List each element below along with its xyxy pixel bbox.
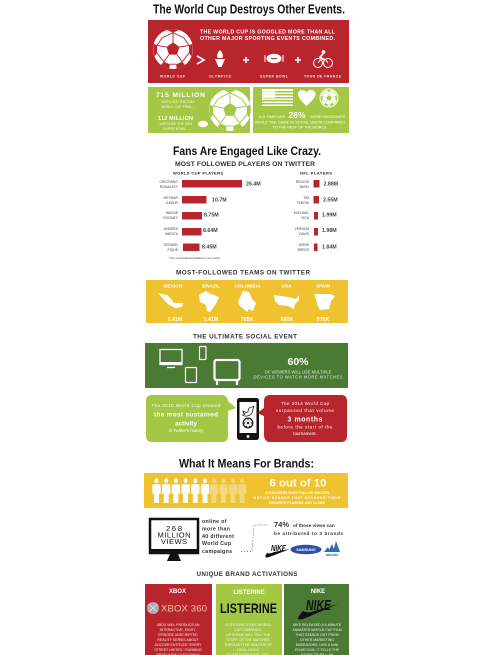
team names: MEXICO (164, 284, 183, 290)
bar chart: world cup players: NEYMAR (163, 196, 179, 200)
bar chart: nfl players: 1.98M (322, 228, 337, 234)
bar chart: world cup players: INIESTA (165, 232, 179, 236)
bar chart: world cup players: JUNIOR (165, 201, 179, 205)
team values: 1.41M (168, 317, 183, 323)
icon: world cup ball (153, 29, 193, 69)
logo: samsung: SAMSUNG (296, 548, 316, 552)
us fans text: ABOUT THE GAME IN SOCIAL MEDIA COMPARED (255, 120, 345, 124)
icon: monitor with views: 268 (166, 524, 182, 533)
event labels: TOUR DE FRANCE (304, 74, 342, 78)
715 caption: WATCHED THE 2010 (162, 100, 195, 104)
title: The World Cup Destroys Other Events. (153, 2, 345, 16)
bar chart: world cup players: PIQUÉ (167, 247, 179, 252)
panel copy: LISTERINE WILL TELL THE (226, 633, 271, 637)
icon: monitor with views: MILLION (158, 530, 190, 540)
panel: xbox (145, 584, 212, 655)
heading: brands: What It Means For Brands: (179, 458, 314, 470)
bar chart: world cup players: 8.75M (204, 212, 219, 218)
bar chart: nfl players: 2.88M (324, 182, 339, 188)
icon: television (214, 360, 240, 385)
footnote: *the most-followed athlete in the world (169, 256, 220, 260)
bar chart: nfl players: BREES (298, 248, 310, 252)
subheading: teams: MOST-FOLLOWED TEAMS ON TWITTER (176, 270, 310, 276)
60 percent stat: 60% (287, 356, 309, 368)
panel heading: NIKE (311, 589, 325, 595)
bar chart: world cup players (160, 170, 261, 260)
stat caption: FAVORITE PLAYERS AND CLUBS (269, 501, 326, 505)
event labels: OLYMPICS (209, 74, 232, 78)
team values: 765K (241, 317, 254, 323)
icon: large ball (209, 89, 251, 131)
panel: listerine (216, 584, 282, 655)
greater than sign (197, 56, 204, 64)
bar chart: nfl players: BUSH (300, 185, 310, 189)
callout: red bubble: surpassed that volume (276, 408, 335, 413)
bar chart: nfl players (294, 170, 339, 252)
bar chart: nfl players: MICHAEL (294, 211, 309, 215)
text: 74 percent: be attributed to 3 brands (274, 531, 343, 536)
bar chart: world cup players: 8.64M (203, 228, 218, 234)
google headline: OTHER MAJOR SPORTING EVENTS COMBINED. (200, 36, 336, 42)
panel copy: XBOX WILL PRODUCE AN (157, 623, 200, 627)
panel copy: SOCCER ENTITLED "EVERY (155, 643, 202, 647)
icon: cyclist (314, 51, 332, 68)
team values: 680K (281, 317, 294, 323)
icon: twitter bird (242, 406, 254, 416)
bar chart: nfl players: REGGIE (296, 180, 310, 184)
panel copy: EPISODE UNSCRIPTED (158, 633, 198, 637)
plus sign (295, 57, 301, 63)
bar chart: world cup players: 26.4M (246, 182, 261, 188)
callout: red bubble (257, 395, 347, 442)
stat caption: CONSUMERS WHO FOLLOW SOCCER (265, 491, 330, 495)
panel copy: PIXAR FILM, IT TELLS THE (295, 648, 340, 652)
bar chart: world cup players: 10.7M (212, 198, 227, 204)
bar chart: world cup players: WAYNE (166, 211, 179, 215)
panel: social event (145, 343, 348, 388)
us fans text: U.S. FANS ARE (259, 115, 286, 119)
text: 74 percent: of those views can (293, 523, 335, 528)
icon: ball in circle (320, 89, 338, 107)
callout: green bubble (146, 395, 236, 442)
logo: adidas: adidas (326, 552, 339, 557)
panel copy: STREET UNITED," RUNNING (154, 648, 202, 652)
google headline: THE WORLD CUP IS GOOGLED MORE THAN ALL (200, 30, 336, 36)
callout: red bubble: The 2014 World Cup (281, 401, 330, 406)
team names: COLOMBIA (234, 284, 261, 290)
country maps (158, 291, 335, 312)
chart heading: NFL PLAYERS (300, 170, 332, 176)
bar chart: nfl players: VERNON (294, 227, 310, 231)
panel copy: ANIMATED WORLD CUP FILM (292, 628, 342, 632)
callout: red bubble: 3 months (288, 416, 323, 424)
panel copy: REALITY SERIES ABOUT (157, 638, 199, 642)
logos: nike samsung adidas (265, 541, 340, 557)
text: online campaigns: World Cup (202, 541, 232, 547)
bar chart: nfl players: 2.55M (323, 198, 338, 204)
us fans text: 26% (288, 110, 306, 120)
chart heading: WORLD CUP PLAYERS (173, 170, 223, 176)
callout: red bubble: tournament. (293, 431, 317, 436)
112 million stat: 112 MILLION (158, 116, 193, 122)
bar chart: world cup players: 8.45M (202, 244, 217, 250)
heading: fans engaged: Fans Are Engaged Like Crazy. (173, 144, 321, 158)
112 caption: SUPER BOWL... (163, 127, 189, 131)
bar chart: nfl players: DAVIS (299, 232, 310, 236)
subheading: most followed players: MOST FOLLOWED PLAYERS ON TWITTER (175, 161, 315, 168)
panel copy: THROUGH THE MOUTHS OF (224, 643, 272, 647)
panel copy: IN ITS FIRST-EVER WORLD (225, 623, 271, 627)
team names: USA (281, 284, 292, 290)
team names: SPAIN (316, 284, 331, 290)
callout: green bubble: the most sustained (154, 412, 218, 418)
callout: red bubble: before the start of the (278, 424, 333, 430)
panel: google comparison (148, 20, 349, 83)
icon: football (265, 54, 283, 63)
logo: xbox 360: XBOX 360 (161, 604, 207, 614)
subheading: social event: THE ULTIMATE SOCIAL EVENT (193, 334, 297, 340)
stat caption: OF VIEWERS WILL USE MULTIPLE (265, 370, 332, 374)
icon: monitor with views (149, 519, 199, 561)
715 caption: WORLD CUP FINAL... (161, 105, 195, 109)
bar chart: nfl players: DREW (299, 243, 310, 247)
text: 74 percent: 74% (274, 520, 289, 529)
panel copy: STORY OF THE MATCHES (226, 638, 270, 642)
logo: nike: NIKE (271, 544, 287, 553)
panel: viewers (148, 87, 251, 133)
bar chart: nfl players: TIM (303, 196, 309, 200)
icon row: people (152, 478, 209, 503)
text: online campaigns: 40 different (202, 534, 234, 540)
team names: BRAZIL (202, 284, 220, 290)
bar chart: world cup players: ANDRÉS (164, 226, 179, 231)
icon: phone (200, 346, 206, 360)
icon: tablet (186, 368, 196, 382)
panel heading: LISTERINE (233, 590, 265, 596)
bar chart: world cup players: ROONEY (163, 216, 179, 220)
subheading: activations: UNIQUE BRAND ACTIVATIONS (196, 571, 298, 578)
team values: 575K (317, 317, 330, 323)
bar chart: nfl players: 1.84M (322, 244, 337, 250)
bar chart: nfl players: VICK (301, 216, 310, 220)
panel copy: OTHER MARKETING (300, 638, 334, 642)
panel copy: ENDEAVORS. LIKE A MINI (296, 643, 338, 647)
panel copy: NIKE RELEASED A 5-MINUTE (293, 623, 342, 627)
logo: nike swoosh: NIKE (306, 597, 332, 614)
icon: monitor (160, 350, 182, 368)
stat caption: NOTICE BRANDS THAT SPONSOR THEIR (254, 496, 341, 500)
stat caption: DEVICES TO WATCH MORE MATCHES (254, 374, 343, 380)
icon: american flag (262, 89, 293, 106)
us fans text: TO THE REST OF THE WORLD. (273, 126, 327, 130)
icon: olympic torch (215, 50, 225, 67)
bar chart: world cup players: GERARD (163, 243, 179, 247)
event labels: WORLD CUP (160, 74, 186, 78)
panel copy: THAT STANDS OUT FROM (295, 633, 339, 637)
bar chart: nfl players: 1.99M (322, 212, 337, 218)
icon: monitor with views: VIEWS (161, 537, 187, 546)
plus sign (243, 57, 249, 63)
text: online campaigns: more than (202, 526, 230, 532)
panel heading: XBOX (169, 589, 186, 595)
text: online campaigns: online of (202, 519, 227, 525)
panel: us fans (253, 87, 349, 133)
icon: ball on phone (242, 418, 254, 428)
715 million stat: 715 MILLION (156, 92, 205, 99)
bar chart: world cup players: RONALDO* (160, 185, 179, 189)
panel copy: INTERACTIVE, EIGHT- (160, 628, 197, 632)
event labels: SUPER BOWL (260, 74, 288, 78)
icon: heart (298, 90, 316, 106)
icon: smartphone (237, 398, 259, 440)
panel copy: FANS, USING (237, 648, 259, 652)
us fans text: MORE PASSIONATE (310, 115, 346, 119)
dotted connector (241, 525, 268, 552)
icon: small football (198, 121, 208, 127)
panel copy: CUP CAMPAIGN, (234, 628, 262, 632)
panel: nike (284, 584, 349, 655)
text: online campaigns: campaigns (202, 549, 232, 555)
callout: green bubble: The 2010 World Cup created (152, 403, 221, 408)
icon row: faded people (210, 478, 246, 503)
panel: teams (146, 280, 348, 323)
bar chart: nfl players: TEBOW (297, 201, 310, 205)
six out of ten stat: 6 out of 10 (270, 478, 326, 490)
logo: listerine: LISTERINE (220, 600, 277, 616)
112 caption: WATCHED THE 2014 (160, 122, 193, 126)
callout: green bubble: activity (175, 420, 197, 428)
team values: 1.41M (204, 317, 219, 323)
bar chart: world cup players: CRISTIANO (160, 180, 178, 184)
callout: green bubble: in Twitter's history (169, 428, 204, 433)
panel: six out of ten (144, 473, 348, 508)
